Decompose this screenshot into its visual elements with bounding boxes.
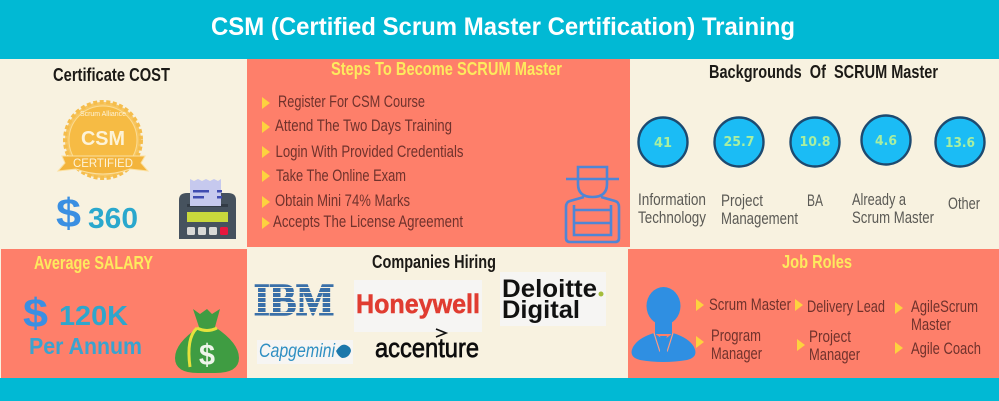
list: steps: Take The Online Exam	[276, 167, 406, 185]
icon: CSM certified badge: Scrum Alliance	[80, 111, 126, 118]
panel: backgrounds	[630, 59, 999, 247]
stat: project management: 25.7	[724, 135, 754, 150]
list: job roles: AgileScrum	[911, 298, 978, 316]
stat: already a scrum master	[852, 116, 934, 227]
stat: already a scrum master: Scrum Master	[852, 209, 934, 227]
list: job roles: Scrum Master	[709, 296, 791, 314]
stat: project management: Management	[721, 210, 798, 228]
icon: CSM certified badge: CERTIFIED	[73, 156, 133, 170]
logo: Deloitte Digital: Digital	[502, 296, 580, 324]
bottom banner	[0, 378, 999, 401]
icon: CSM certified badge: CSM	[81, 128, 125, 150]
panel: average salary	[1, 249, 247, 378]
list: job roles: Program	[711, 327, 761, 345]
stat: other	[936, 118, 984, 213]
stat: project management	[714, 118, 798, 228]
icon: money bag: $	[199, 339, 215, 372]
cost amount: 360	[88, 203, 138, 235]
stat: already a scrum master: 4.6	[875, 134, 897, 149]
cost amount	[56, 190, 138, 236]
logo: IBM	[254, 284, 334, 316]
logo: Honeywell	[354, 280, 482, 332]
logo: Honeywell: Honeywell	[356, 289, 480, 319]
heading: steps: Steps To Become SCRUM Master	[331, 59, 562, 79]
list: steps: Accepts The License Agreement	[273, 213, 463, 231]
list: job roles: Project	[809, 328, 851, 346]
stat: other: Other	[948, 195, 980, 213]
panel: certificate cost	[1, 59, 247, 248]
list: steps: Attend The Two Days Training	[275, 117, 452, 135]
stat: other: 13.6	[945, 136, 975, 151]
logo: Deloitte Digital: Deloitte	[502, 275, 597, 303]
list: job roles: Agile Coach	[911, 340, 981, 358]
salary amount: Per Annum	[29, 333, 142, 359]
stat: BA	[790, 118, 840, 210]
list: job roles	[696, 296, 981, 364]
stat: information technology: Technology	[638, 209, 707, 227]
icon: money bag	[175, 309, 239, 373]
title banner	[0, 0, 999, 59]
cost amount: $	[56, 190, 81, 236]
heading: average salary: Average SALARY	[34, 253, 153, 273]
stat: information technology: Information	[638, 191, 706, 209]
list: steps: Register For CSM Course	[278, 93, 425, 111]
panel: companies hiring	[254, 254, 606, 364]
list: job roles: Master	[911, 316, 951, 334]
salary amount: 120K	[59, 300, 128, 331]
icon: CSM certified badge	[58, 102, 148, 178]
stat: already a scrum master: Already a	[852, 191, 907, 209]
heading: certificate cost: Certificate COST	[53, 65, 170, 85]
logo: Deloitte Digital	[500, 272, 606, 326]
list: steps	[262, 93, 464, 231]
stat: information technology	[638, 118, 707, 227]
list: steps: Login With Provided Credentials	[276, 143, 464, 161]
icon: scrum master figure	[566, 167, 619, 242]
icon: business person	[632, 287, 695, 362]
salary amount: $	[23, 290, 48, 336]
logo: IBM: IBM	[254, 275, 334, 325]
heading: companies hiring: Companies Hiring	[372, 252, 496, 272]
list: job roles: Delivery Lead	[807, 298, 885, 316]
list: steps: Obtain Mini 74% Marks	[275, 192, 410, 210]
title banner: CSM (Certified Scrum Master Certification) Training	[211, 13, 795, 41]
stat: BA: BA	[807, 192, 823, 210]
logo: accenture: accenture	[375, 333, 479, 363]
logo: Capgemini: Capgemini	[259, 341, 336, 362]
stat: BA: 10.8	[800, 135, 830, 150]
panel: steps	[247, 59, 630, 247]
panel: job roles	[628, 249, 999, 378]
stat: project management: Project	[721, 192, 763, 210]
heading: job roles: Job Roles	[782, 252, 852, 272]
stat: information technology: 41	[654, 136, 672, 151]
salary amount	[23, 290, 142, 359]
list: job roles: Manager	[711, 345, 762, 363]
icon: cash register	[179, 179, 236, 239]
list: job roles: Manager	[809, 346, 860, 364]
heading: backgrounds: Backgrounds Of SCRUM Master	[709, 62, 938, 82]
